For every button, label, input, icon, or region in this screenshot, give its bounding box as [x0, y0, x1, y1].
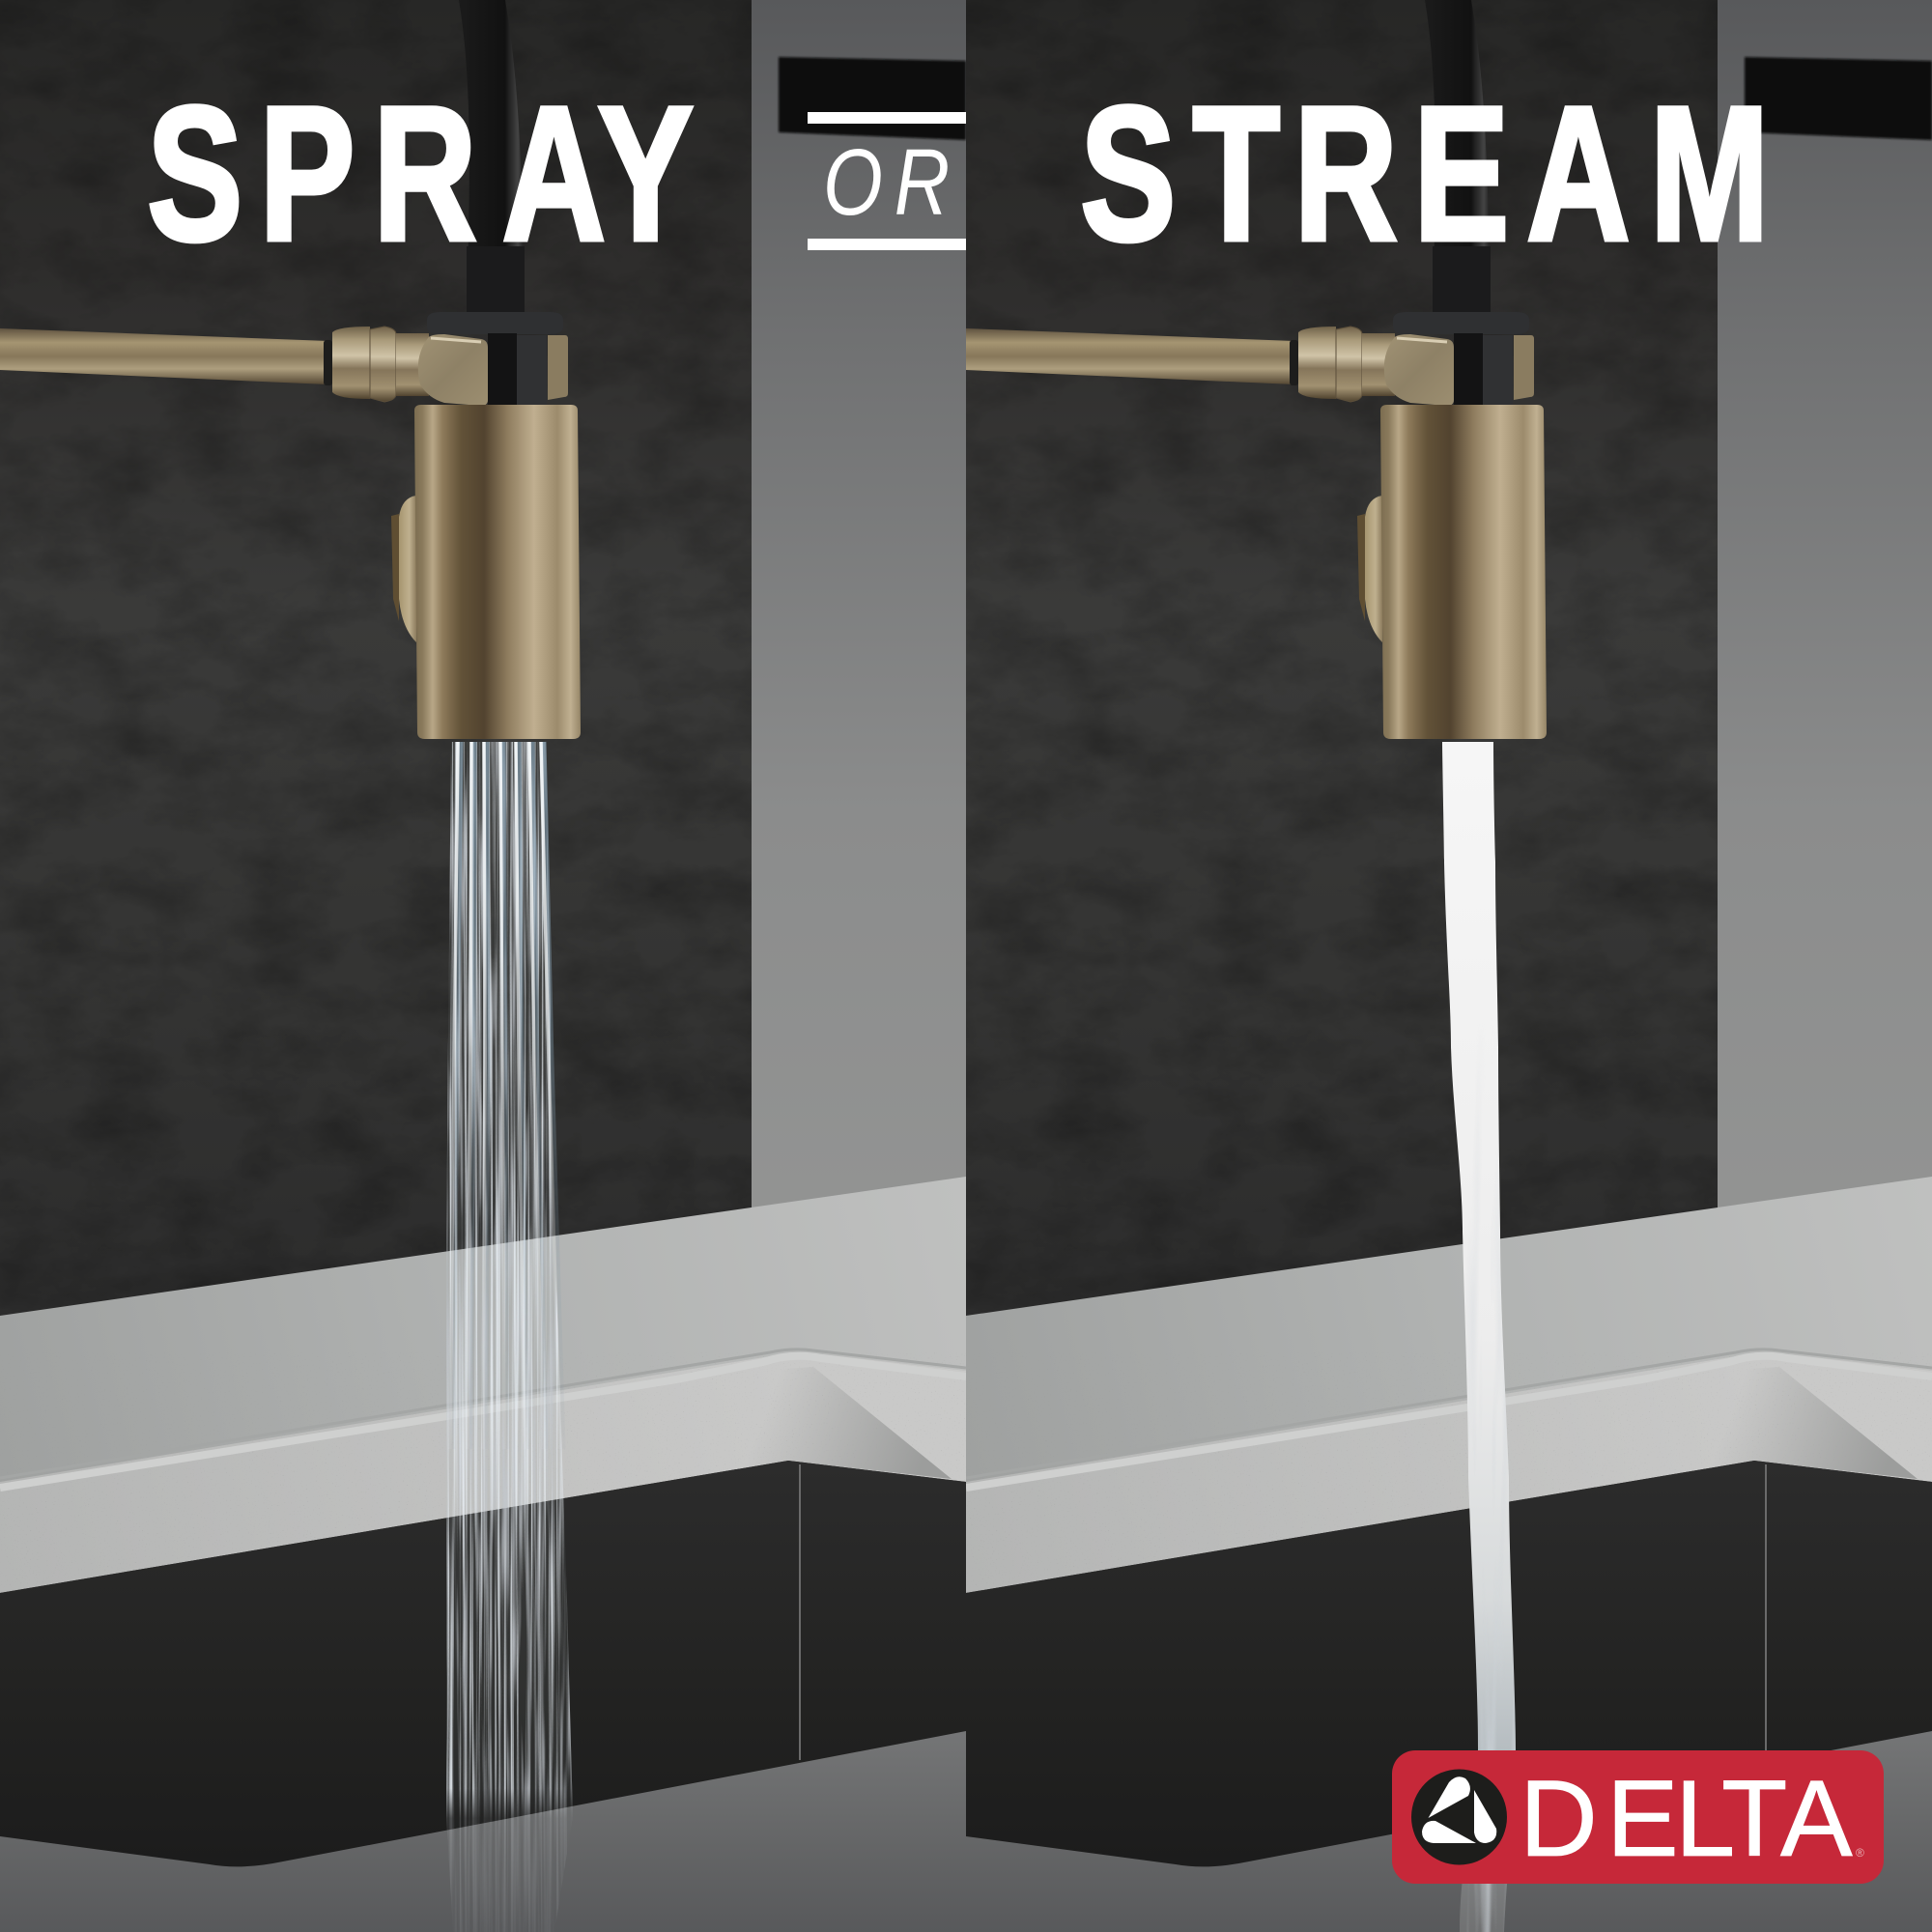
water streak layer — [440, 742, 580, 1932]
foreground counter — [0, 1719, 966, 1932]
trigger paddle — [399, 496, 416, 642]
elbow highlight — [1397, 338, 1447, 342]
hose sleeve — [467, 246, 525, 319]
grey side wall — [1718, 0, 1932, 1352]
title: STREAM: STREAM — [1080, 68, 1769, 281]
stream streaks — [1430, 742, 1526, 1932]
black hose — [1425, 0, 1491, 315]
wall texture — [966, 0, 1718, 1352]
connector o-ring — [1290, 340, 1298, 385]
solid water stream — [1430, 742, 1526, 1932]
spray water — [440, 742, 580, 1932]
bright streaks — [440, 742, 580, 1932]
elbow — [418, 334, 488, 406]
center body right — [517, 335, 547, 365]
connector neck — [396, 333, 429, 396]
counter rim — [966, 1352, 1932, 1593]
countertop deck — [966, 1177, 1932, 1488]
sink basin — [0, 1461, 966, 1866]
shelf arm rod — [966, 328, 1294, 384]
wordmark: DELTA — [1520, 1758, 1853, 1879]
trigger paddle — [1365, 496, 1382, 642]
connector sleeve — [1298, 327, 1336, 399]
hose sleeve — [1433, 246, 1491, 319]
countertop deck — [0, 1177, 966, 1488]
collar ring — [427, 312, 563, 334]
connector groove — [370, 327, 396, 402]
registered mark: ® — [1856, 1846, 1864, 1860]
shelf arm rod — [0, 328, 328, 384]
mark drops — [1422, 1776, 1496, 1843]
rim inner corner shade — [1700, 1367, 1918, 1479]
OR word: OR — [823, 130, 950, 235]
elbow — [1384, 334, 1454, 406]
top rule — [808, 112, 966, 124]
title: OR with rules — [808, 112, 966, 250]
brass spray head — [1380, 405, 1547, 739]
dim water veil — [440, 742, 580, 1932]
rim speckle — [966, 1352, 1932, 1593]
connector groove — [1336, 327, 1362, 402]
connector sleeve — [332, 327, 370, 399]
back gold tab — [548, 335, 568, 400]
connector o-ring — [324, 340, 332, 385]
counter rim — [0, 1352, 966, 1593]
bottom rule — [808, 239, 966, 250]
rim edge line — [386, 1349, 966, 1416]
elbow highlight — [431, 338, 481, 342]
mark circle — [1411, 1770, 1507, 1864]
rim edge line — [966, 1350, 1932, 1478]
center body right — [1483, 335, 1513, 407]
foreground counter — [966, 1719, 1932, 1932]
title: SPRAY: SPRAY — [147, 68, 694, 281]
black hose — [459, 0, 522, 246]
wall texture — [0, 0, 752, 1352]
rim inner corner shade — [780, 1368, 952, 1479]
panel: spray scene — [0, 0, 966, 1932]
logo: Delta badge — [1392, 1750, 1884, 1884]
grey side wall — [752, 0, 966, 1208]
connector neck — [1362, 333, 1395, 396]
main jets — [450, 742, 562, 1449]
dark slate wall — [0, 412, 752, 1014]
rim speckle — [0, 1352, 966, 1593]
rim edge bevel — [0, 1356, 966, 1488]
sink corner seam — [799, 1464, 801, 1760]
jet shadows — [452, 742, 562, 1449]
panel: stream scene — [966, 0, 1932, 1932]
brass spray head — [414, 405, 581, 739]
black center body — [1454, 333, 1483, 408]
sink basin — [966, 1461, 1932, 1866]
icon: Delta triangle mark — [1411, 1770, 1507, 1864]
collar ring — [1393, 312, 1529, 334]
black center body — [488, 333, 517, 408]
sink corner seam — [1765, 1464, 1767, 1760]
dark shelf block — [1745, 57, 1932, 140]
badge background — [1392, 1750, 1884, 1884]
jet highlights — [450, 742, 560, 1449]
grey streaks — [440, 742, 580, 1932]
rim edge bevel — [966, 1356, 1932, 1488]
dark shelf block — [779, 57, 966, 140]
dark slate wall — [966, 0, 1718, 1352]
trigger back — [391, 514, 399, 621]
trigger back — [1357, 514, 1365, 621]
back gold tab — [1514, 335, 1534, 400]
stream body — [1430, 742, 1526, 1932]
